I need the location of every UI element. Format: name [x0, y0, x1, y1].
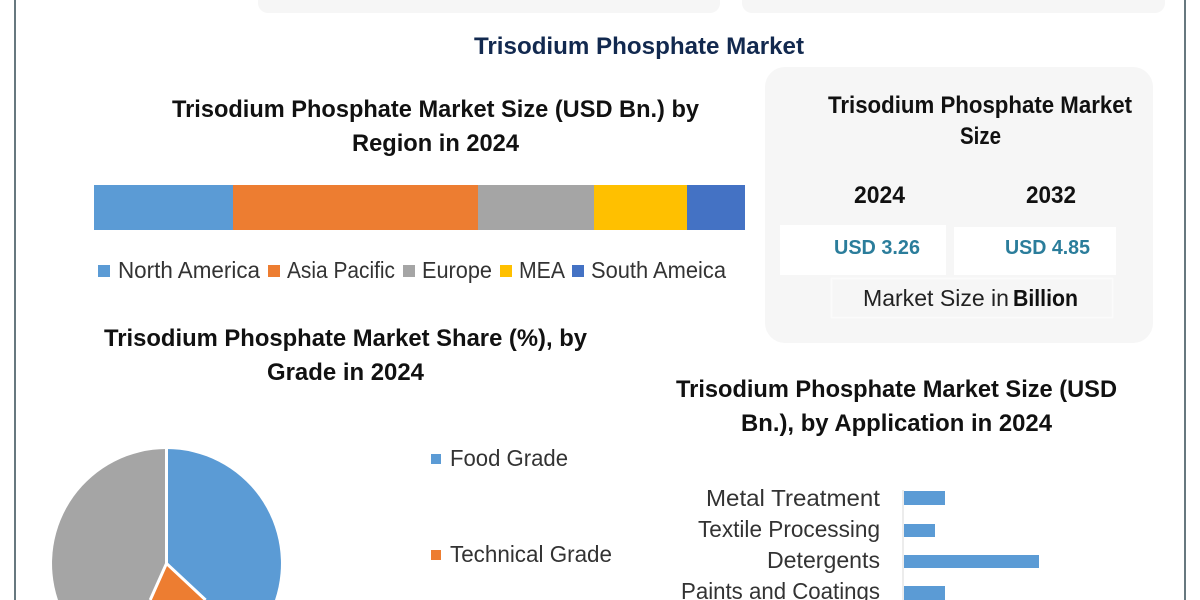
heading: application chart: Trisodium Phosphate Market Size (USD: [676, 376, 1117, 403]
grade legend: [431, 445, 612, 567]
pie chart: [52, 449, 281, 600]
top panel right: [742, 0, 1165, 13]
heading: market size: Trisodium Phosphate Market: [828, 92, 1132, 119]
heading: market size: Size: [960, 123, 1001, 150]
bar chart: [681, 485, 1039, 600]
heading: region chart: [172, 96, 700, 157]
value 2032: [954, 227, 1116, 275]
heading: grade chart: Grade in 2024: [267, 359, 425, 386]
heading: region chart: Trisodium Phosphate Market Size (USD Bn.) by: [172, 96, 700, 123]
unit note: Market Size in: [863, 285, 1009, 311]
year 2032: 2032: [1026, 182, 1076, 209]
application chart: [676, 376, 1117, 600]
panel: market size: [765, 67, 1153, 343]
top panel left: [258, 0, 720, 13]
grade legend: Technical Grade: [450, 541, 612, 567]
unit note: [832, 278, 1112, 318]
bar chart: Textile Processing: [698, 516, 880, 542]
region chart: [94, 96, 745, 283]
stacked bar: [94, 185, 745, 230]
heading: grade chart: Trisodium Phosphate Market Share (%), by: [104, 325, 588, 352]
title: Trisodium Phosphate Market: [474, 33, 804, 60]
heading: market size: [828, 92, 1132, 150]
heading: application chart: Bn.), by Application in 2024: [741, 410, 1053, 437]
unit note: Billion: [1013, 285, 1078, 311]
region legend: South Ameica: [591, 257, 726, 283]
grade chart: [52, 325, 612, 600]
value 2024: [780, 225, 946, 275]
heading: region chart: Region in 2024: [352, 130, 520, 157]
grade legend: Food Grade: [450, 445, 568, 471]
bar chart: Detergents: [767, 547, 880, 573]
bar chart: Metal Treatment: [706, 485, 881, 511]
region legend: [98, 257, 726, 283]
heading: grade chart: [104, 325, 588, 386]
region legend: MEA: [519, 257, 566, 283]
region legend: Europe: [422, 257, 492, 283]
region legend: Asia Pacific: [287, 257, 395, 283]
heading: application chart: [676, 376, 1117, 437]
value 2032: USD 4.85: [1005, 237, 1090, 259]
region legend: North America: [118, 257, 260, 283]
year 2024: 2024: [854, 182, 906, 209]
value 2024: USD 3.26: [834, 237, 920, 259]
